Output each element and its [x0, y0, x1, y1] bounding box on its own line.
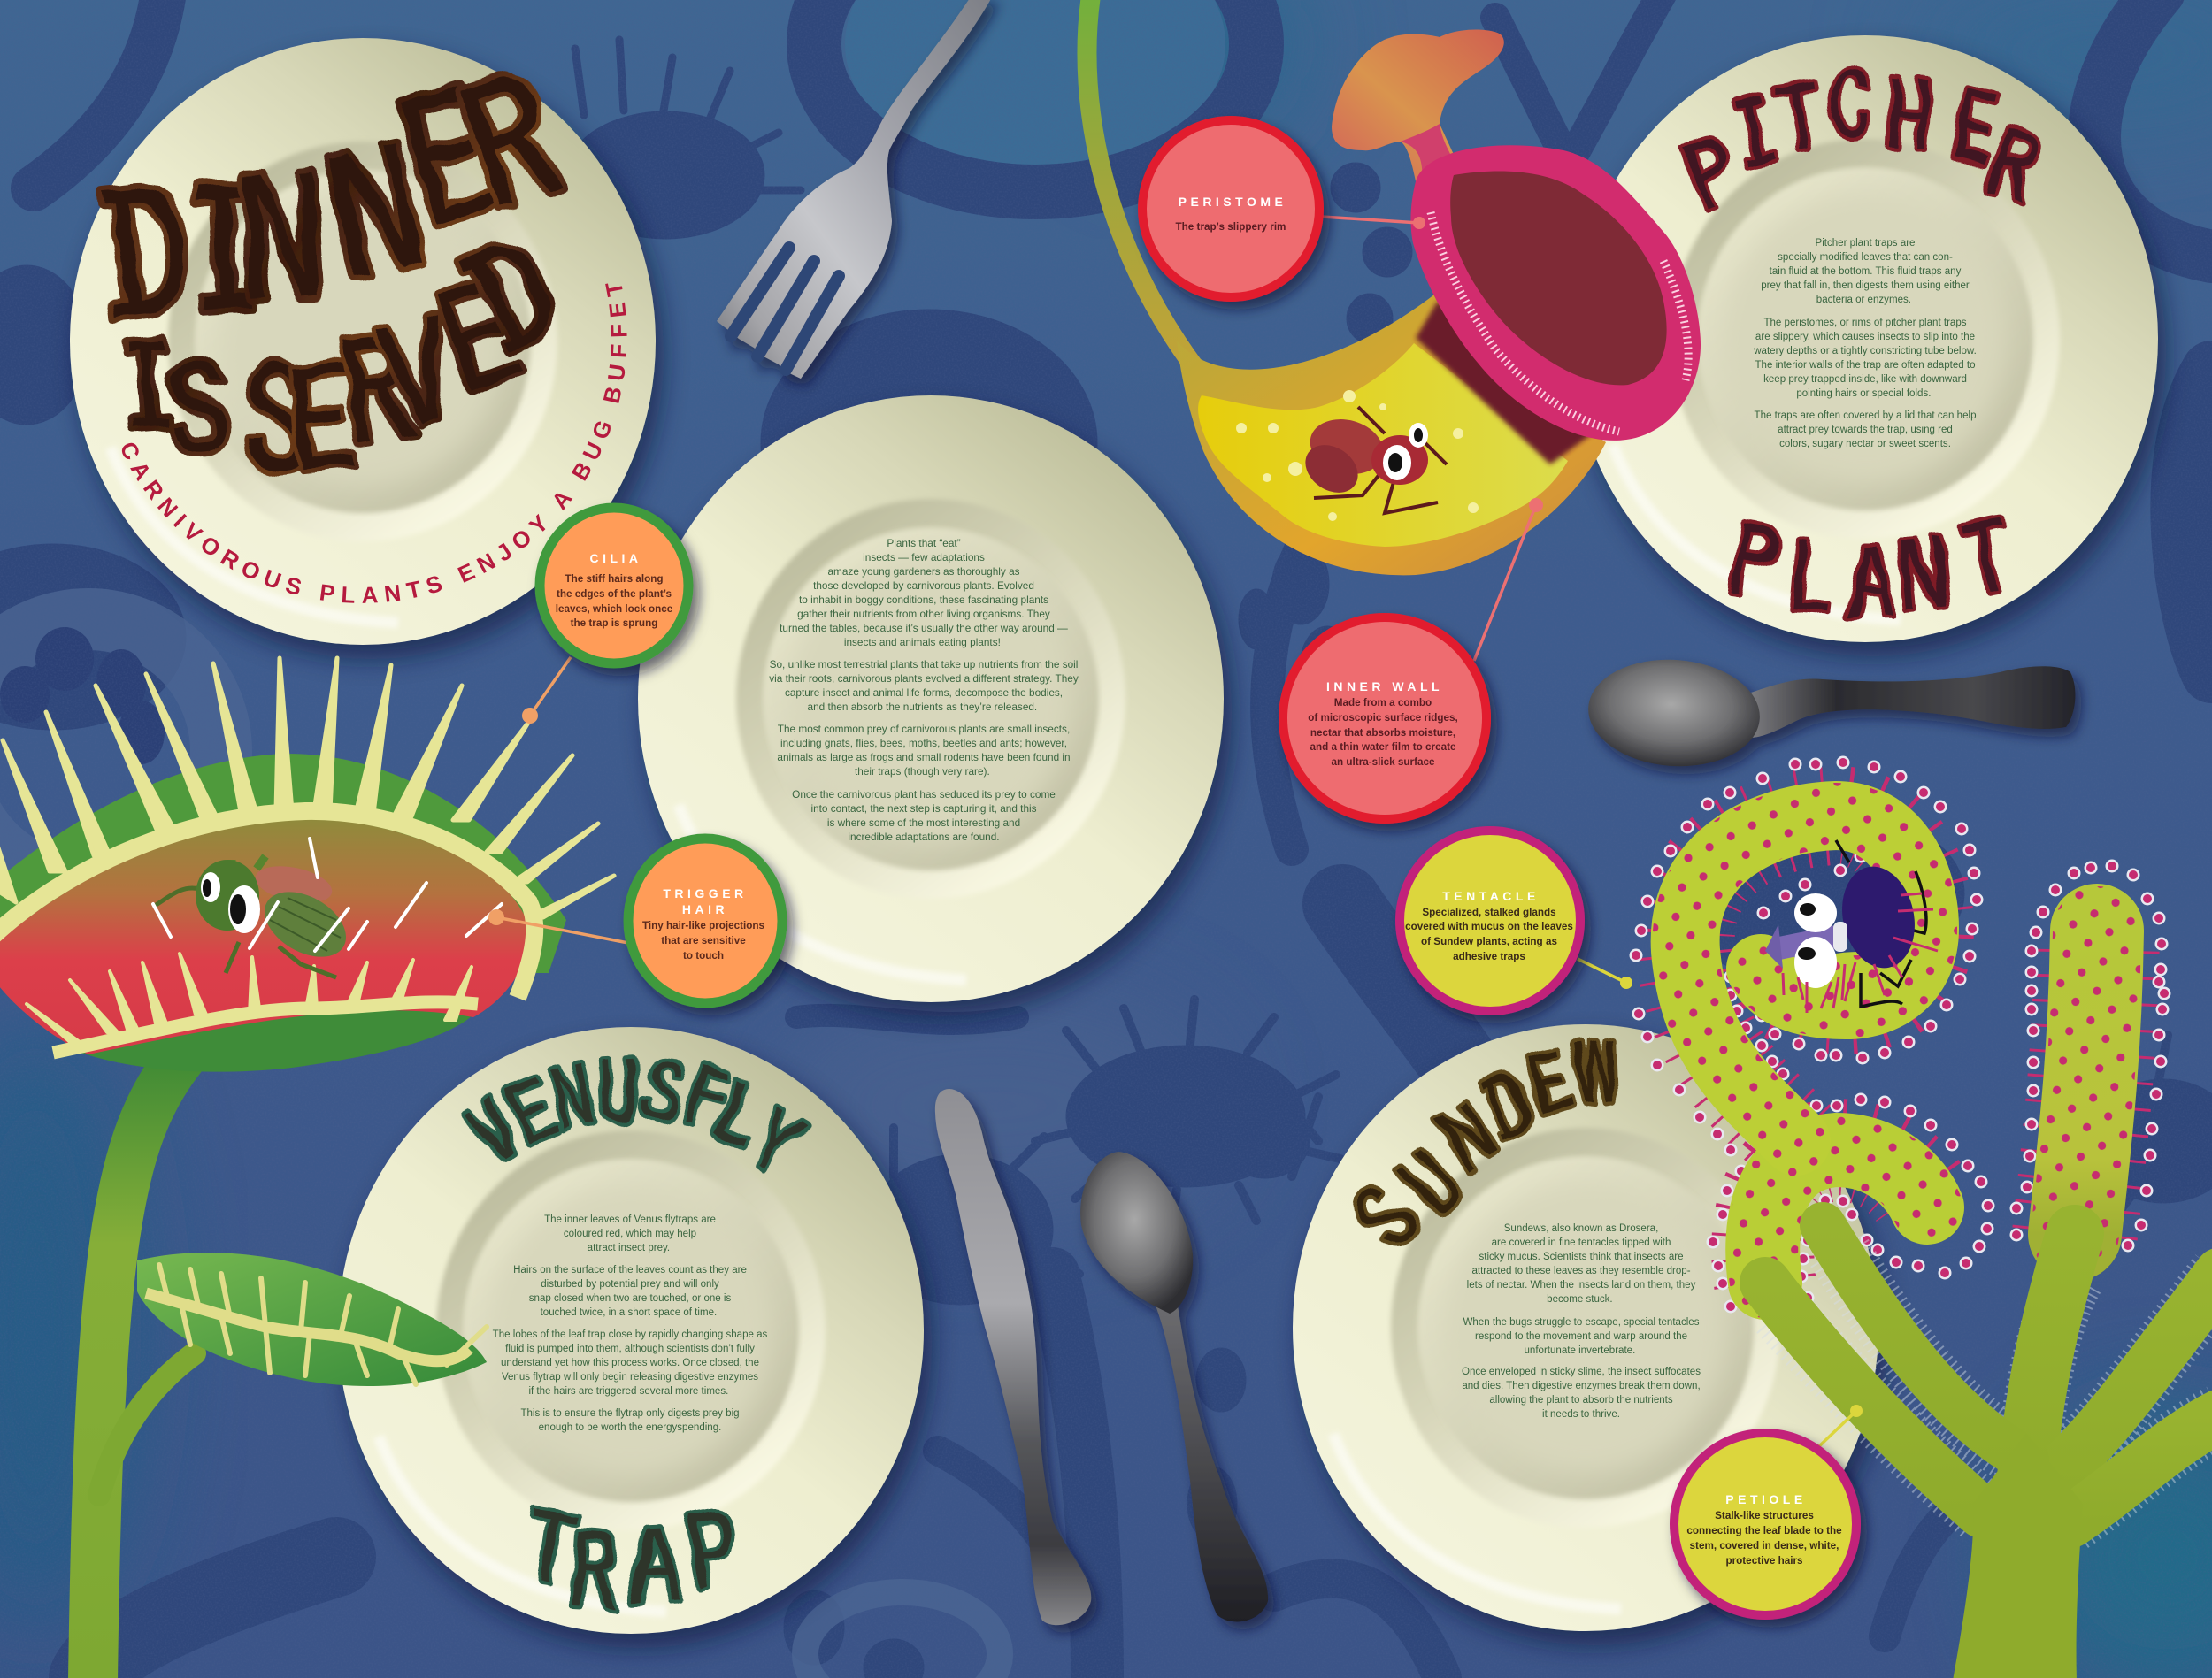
trigger hairs	[153, 839, 502, 951]
venus fly trap text: touched twice, in a short space of time.	[541, 1307, 717, 1318]
title: dinner is served: IS	[111, 323, 234, 473]
sundew text: Once enveloped in sticky slime, the insect suffocates	[1462, 1367, 1701, 1377]
intro text: insects — few adaptations	[863, 551, 985, 563]
intro text: The most common prey of carnivorous plants are small insects,	[778, 723, 1070, 735]
stems	[93, 1057, 195, 1678]
callout: petiole: protective hairs	[1725, 1555, 1803, 1567]
upper rim	[0, 811, 534, 998]
callout: trigger hair: Tiny hair-like projections	[642, 920, 765, 931]
callout: petiole: Stalk-like structures	[1715, 1510, 1814, 1521]
title: venus fly trap	[454, 1047, 816, 1626]
inner wall	[1416, 301, 1593, 464]
callout: cilia	[522, 508, 688, 724]
callout: trigger hair: TRIGGER	[663, 886, 748, 900]
intro text: into contact, the next step is capturing it, and this	[810, 802, 1037, 815]
plate: title	[67, 38, 676, 671]
fork	[717, 0, 993, 379]
venus fly trap text: disturbed by potential prey and will only	[541, 1279, 719, 1290]
connector	[1322, 217, 1419, 223]
callout: trigger hair: that are sensitive	[661, 935, 746, 946]
callout: tentacle: Specialized, stalked glands	[1422, 907, 1556, 918]
connector	[530, 657, 571, 716]
title: dinner is served	[96, 47, 582, 495]
open trap: upper lobe	[0, 754, 566, 973]
callout: petiole: PETIOLE	[1725, 1492, 1807, 1506]
sundew text: sticky mucus. Scientists think that insects are	[1479, 1252, 1684, 1262]
venus fly trap text: if the hairs are triggered several more times.	[528, 1386, 728, 1397]
spoon: upper	[1585, 654, 2075, 772]
callout: petiole	[1674, 1405, 1863, 1615]
intro text: their traps (though very rare).	[855, 765, 990, 778]
plate: pitcher plant	[1572, 35, 2166, 656]
intro text: So, unlike most terrestrial plants that take up nutrients from the soil	[770, 658, 1078, 670]
title: pitcher plant	[1673, 55, 2052, 634]
callout: trigger hair: HAIR	[682, 902, 728, 916]
callout: tentacle	[1400, 831, 1632, 1011]
sundew text: are covered in fine tentacles tipped with	[1492, 1237, 1671, 1248]
peristome rim	[1410, 145, 1701, 441]
neck	[1401, 124, 1460, 186]
venus fly trap plant	[0, 658, 614, 1678]
spider	[1765, 840, 1938, 1013]
callout: cilia: the trap is sprung	[571, 617, 657, 629]
pitcher plant text: tain fluid at the bottom. This fluid traps any	[1770, 266, 1962, 277]
venus fly trap text: The inner leaves of Venus flytraps are	[544, 1214, 716, 1225]
venus fly trap text: This is to ensure the flytrap only digests prey big	[520, 1408, 740, 1419]
intro text: capture insect and animal life forms, decompose the bodies,	[785, 686, 1063, 699]
callout: inner wall: INNER WALL	[1326, 679, 1443, 693]
pitcher plant text: The interior walls of the trap are often adapted to	[1755, 360, 1976, 371]
intro text: via their roots, carnivorous plants evolved a different strategy. They	[769, 672, 1079, 685]
pitcher plant text: keep prey trapped inside, like with downward	[1763, 374, 1967, 385]
leaf blades	[1686, 816, 2097, 1283]
pitcher body	[1177, 292, 1606, 575]
callout: cilia: the edges of the plant’s	[557, 588, 672, 600]
venus fly trap text: Venus flytrap will only begin releasing digestive enzymes	[502, 1372, 758, 1383]
digestive liquid	[1198, 343, 1568, 547]
connector	[496, 917, 628, 943]
pitcher plant text: bacteria or enzymes.	[1816, 295, 1911, 305]
venus fly trap text: fluid is pumped into them, although scientists don’t fully	[505, 1344, 755, 1354]
callout: cilia: leaves, which lock once	[556, 603, 673, 615]
venus fly trap text: The lobes of the leaf trap close by rapidly changing shape as	[493, 1329, 768, 1340]
sundew text: Sundews, also known as Drosera,	[1504, 1223, 1658, 1234]
title: venus fly trap: VENUS FLY	[454, 1047, 816, 1191]
intro text: incredible adaptations are found.	[848, 831, 1000, 843]
title: pitcher plant: PITCHER	[1673, 55, 2052, 227]
pitcher plant text: prey that fall in, then digests them using either	[1761, 280, 1970, 291]
intro text: animals as large as frogs and small rodents have been found in	[777, 751, 1071, 763]
pitcher plant text: specially modified leaves that can con-	[1778, 252, 1953, 263]
callout: trigger hair: to touch	[683, 950, 724, 962]
callout: cilia: CILIA	[589, 551, 642, 565]
callout: inner wall: Made from a combo	[1334, 697, 1432, 709]
spoon: lower	[1080, 1152, 1268, 1621]
title: venus fly trap: TRAP	[516, 1494, 749, 1626]
connector	[1819, 1411, 1856, 1446]
marker	[1413, 217, 1425, 229]
callout: tentacle: covered with mucus on the leaves	[1405, 921, 1573, 932]
teeth	[0, 658, 614, 917]
trap interior	[0, 818, 529, 1054]
venus fly trap text: enough to be worth the energyspending.	[539, 1422, 721, 1433]
sundew text: lets of nectar. When the insects land on them, they	[1467, 1280, 1696, 1291]
pitcher plant text: pointing hairs or special folds.	[1796, 388, 1931, 399]
pitcher plant	[1087, 0, 1701, 575]
pitcher plant text: attract prey towards the trap, using red	[1778, 425, 1953, 435]
venus fly trap text: Hairs on the surface of the leaves count as they are	[513, 1265, 747, 1276]
callout: inner wall	[1283, 498, 1543, 819]
intro text: insects and animals eating plants!	[844, 636, 1001, 648]
tentacle droplets	[1636, 762, 2164, 1306]
callout: petiole: stem, covered in dense, white,	[1690, 1540, 1839, 1552]
intro text: and then absorb the nutrients as they’re released.	[808, 701, 1037, 713]
intro text: Plants that “eat”	[887, 537, 961, 549]
subtitle along the plate rim: CARNIVOROUS PLANTS ENJOY A BUG BUFFET	[122, 283, 627, 603]
callout: petiole: connecting the leaf blade to the	[1686, 1525, 1842, 1536]
sundew plant	[1636, 762, 2212, 1678]
callout: trigger hair	[488, 839, 782, 1003]
pitcher plant text: are slippery, which causes insects to slip into the	[1755, 332, 1975, 342]
marker	[1850, 1405, 1863, 1417]
callout: inner wall: an ultra-slick surface	[1332, 756, 1435, 768]
lid	[1332, 30, 1504, 181]
pitcher plant text: The peristomes, or rims of pitcher plant traps	[1763, 318, 1967, 328]
venus fly trap text: coloured red, which may help	[564, 1229, 696, 1239]
marker	[1529, 498, 1543, 512]
intro text: to inhabit in boggy conditions, these fascinating plants	[799, 594, 1048, 606]
callout: peristome	[1142, 120, 1425, 297]
callout: inner wall: and a thin water film to create	[1310, 741, 1456, 753]
trunk and branches	[1765, 1225, 2212, 1521]
title: dinner is served: DINNER	[96, 47, 582, 348]
callout: cilia: The stiff hairs along	[565, 573, 664, 585]
closed trap	[137, 1253, 487, 1386]
callout: tentacle: adhesive traps	[1453, 951, 1525, 962]
sundew text: attracted to these leaves as they resemble drop-	[1471, 1266, 1691, 1276]
callout: peristome: PERISTOME	[1179, 195, 1286, 209]
connector	[1578, 959, 1626, 983]
pitcher plant text: colors, sugary nectar or sweet scents.	[1779, 439, 1951, 449]
venus fly trap text: snap closed when two are touched, or one is	[529, 1293, 731, 1304]
sundew text: it needs to thrive.	[1542, 1409, 1620, 1420]
pitcher plant text: Pitcher plant traps are	[1816, 238, 1915, 249]
callout: tentacle: TENTACLE	[1442, 889, 1540, 903]
marker	[522, 708, 538, 724]
title: dinner is served: SERVED	[239, 213, 581, 495]
fly on trap	[153, 856, 357, 977]
plate: introduction	[638, 395, 1232, 1016]
sundew text: allowing the plant to absorb the nutrients	[1489, 1395, 1673, 1406]
marker	[1620, 977, 1632, 989]
intro text: including gnats, flies, bees, moths, beetles and ants; however,	[780, 737, 1067, 749]
intro text: amaze young gardeners as thoroughly as	[827, 565, 1020, 578]
callout: inner wall: nectar that absorbs moisture,	[1310, 727, 1455, 739]
plate: sundew	[1293, 1024, 1886, 1645]
pitcher plant text: The traps are often covered by a lid that can help	[1755, 410, 1976, 421]
tentacles	[1686, 816, 2097, 1283]
marker	[488, 909, 504, 925]
sundew text: unfortunate invertebrate.	[1524, 1345, 1635, 1356]
sundew text: When the bugs struggle to escape, special tentacles	[1463, 1317, 1700, 1328]
knife	[935, 1089, 1091, 1625]
lower lobe	[62, 1004, 482, 1072]
intro text: turned the tables, because it’s usually the other way around —	[780, 622, 1068, 634]
sundew text: and dies. Then digestive enzymes break them down,	[1462, 1381, 1701, 1391]
fly in liquid	[1296, 407, 1447, 513]
intro text: gather their nutrients from other living organisms. They	[797, 608, 1050, 620]
sundew text: become stuck.	[1547, 1294, 1613, 1305]
title: pitcher plant: PLANT	[1724, 506, 2021, 634]
sundew text: respond to the movement and warp around the	[1475, 1331, 1687, 1342]
callout: peristome: The trap’s slippery rim	[1176, 221, 1286, 233]
venus fly trap text: attract insect prey.	[588, 1243, 670, 1253]
connector	[1474, 505, 1536, 661]
tendril	[1087, 0, 1194, 367]
title: sundew: SUNDEW	[1339, 1029, 1625, 1263]
callout: tentacle: of Sundew plants, acting as	[1421, 936, 1557, 947]
intro text: Once the carnivorous plant has seduced its prey to come	[792, 788, 1056, 801]
venus fly trap text: understand yet how this process works. Once closed, the	[501, 1358, 759, 1368]
lower rim and teeth	[27, 954, 478, 1053]
intro text: is where some of the most interesting and	[827, 816, 1020, 829]
plate: venus fly trap	[338, 1027, 932, 1648]
pitcher plant text: watery depths or a tightly constricting tube below.	[1753, 346, 1977, 356]
callout: inner wall: of microscopic surface ridges,	[1308, 712, 1458, 724]
intro text: those developed by carnivorous plants. Evolved	[813, 579, 1034, 592]
